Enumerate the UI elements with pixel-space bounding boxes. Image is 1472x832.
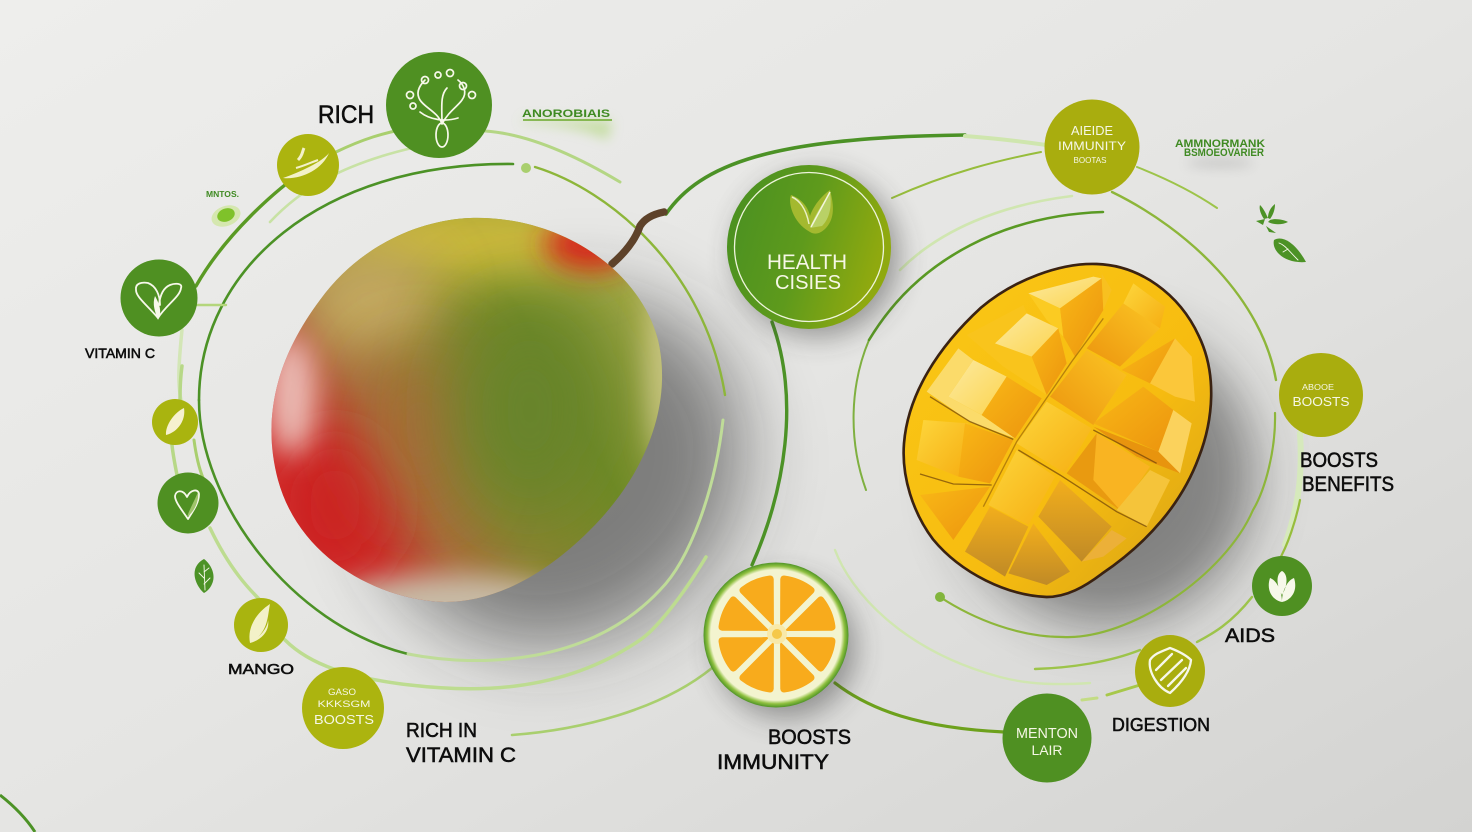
cube lower center bbox=[988, 450, 1055, 525]
cube bottom center bbox=[1038, 480, 1112, 562]
label: rich in vitamin c bbox=[406, 720, 516, 767]
node: small olive leaf bbox=[152, 399, 198, 445]
label: mango: MANGO bbox=[228, 662, 294, 678]
node: boosts right: ABOOE bbox=[1302, 382, 1334, 392]
node: immunity: IMMUNITY bbox=[1058, 139, 1126, 153]
skin and flesh bbox=[904, 264, 1211, 597]
label: boosts benefits: BOOSTS bbox=[1300, 449, 1378, 472]
central s-curve arcs bbox=[666, 135, 1046, 732]
right orbit arcs bbox=[521, 152, 1301, 700]
badge text: HEALTH bbox=[767, 251, 847, 274]
cube top bbox=[1028, 277, 1102, 308]
label: digestion: DIGESTION bbox=[1112, 714, 1210, 735]
cube left bbox=[917, 420, 968, 477]
left orbit arcs bbox=[172, 130, 725, 735]
cube left center bbox=[927, 348, 1015, 438]
cut mango bbox=[904, 264, 1211, 597]
label: vitamin c: VITAMIN C bbox=[85, 345, 155, 361]
label: rich in vitamin c: VITAMIN C bbox=[406, 744, 516, 767]
label: boosts immunity: BOOSTS bbox=[768, 726, 851, 749]
label: aids: AIDS bbox=[1225, 626, 1275, 647]
health badge: CISIES bbox=[775, 272, 841, 294]
icon: heart leaf bbox=[790, 190, 833, 234]
node: plant icon bbox=[386, 52, 492, 158]
cube upper center bbox=[1050, 350, 1127, 425]
label: boosts benefits: BENEFITS bbox=[1302, 473, 1394, 496]
cube lower left bbox=[920, 487, 990, 540]
cube upper right bbox=[1087, 303, 1160, 367]
cube upper left bbox=[967, 305, 1047, 395]
citrus shadow bbox=[716, 578, 856, 718]
node: mention lair: LAIR bbox=[1032, 742, 1062, 758]
cube bottom left bbox=[965, 507, 1028, 577]
node: boosts text: BOOSTS bbox=[314, 712, 374, 727]
node: mention lair bbox=[1002, 694, 1092, 782]
health badge bbox=[727, 165, 899, 337]
icon: leaf right bbox=[1274, 238, 1306, 262]
node: boosts right bbox=[1279, 353, 1363, 437]
node: boosts right: BOOSTS bbox=[1292, 394, 1350, 409]
small green label: right bbox=[1175, 138, 1265, 167]
small green label: anorobials bbox=[522, 108, 612, 140]
label: rich in vitamin c: RICH IN bbox=[406, 720, 477, 742]
node: olive leaf bbox=[277, 134, 339, 196]
small green label: right: AMMNORMANK bbox=[1175, 138, 1265, 150]
label: rich: RICH bbox=[318, 101, 374, 129]
node: olive sprout bbox=[234, 598, 288, 652]
node: boosts text: KKKSGM bbox=[318, 699, 371, 710]
icon: leaf bbox=[195, 559, 214, 593]
small green label: right: BSMOEOVARIER bbox=[1184, 147, 1264, 159]
node: immunity: BOOTAS bbox=[1074, 155, 1107, 165]
cube right bbox=[1122, 338, 1177, 397]
small green label: anorobials: ANOROBIAIS bbox=[522, 108, 610, 120]
whole mango bbox=[271, 208, 668, 602]
node: olive shield bbox=[1135, 635, 1205, 707]
icon: droplet bbox=[208, 201, 244, 231]
node: immunity bbox=[1044, 100, 1140, 194]
label: boosts immunity bbox=[717, 726, 851, 774]
node: boosts text: GASO bbox=[328, 687, 356, 697]
node: green heart bbox=[158, 472, 218, 534]
icon: leaf sprig bbox=[1256, 204, 1288, 233]
small green label: left: MNTOS. bbox=[206, 189, 239, 199]
node: green leaves bbox=[1252, 556, 1312, 616]
node: immunity: AIEIDE bbox=[1071, 123, 1113, 138]
shadow: whole mango bbox=[307, 222, 813, 718]
label: boosts immunity: IMMUNITY bbox=[717, 751, 829, 774]
cuts bbox=[983, 318, 1103, 507]
cube right center bbox=[1093, 387, 1173, 452]
stem bbox=[612, 212, 664, 264]
node: mention lair: MENTON bbox=[1016, 726, 1078, 742]
shadow: cut mango bbox=[955, 325, 1255, 625]
node: heart leaf vitamin c bbox=[120, 260, 198, 336]
cube center bbox=[1017, 402, 1092, 473]
cube lower right bbox=[1067, 433, 1120, 510]
node: boosts text bbox=[302, 667, 384, 749]
citrus slice bbox=[704, 562, 856, 718]
cube bottom bbox=[1008, 523, 1070, 585]
corner arc bbox=[0, 795, 35, 832]
label: boosts benefits bbox=[1300, 449, 1394, 496]
